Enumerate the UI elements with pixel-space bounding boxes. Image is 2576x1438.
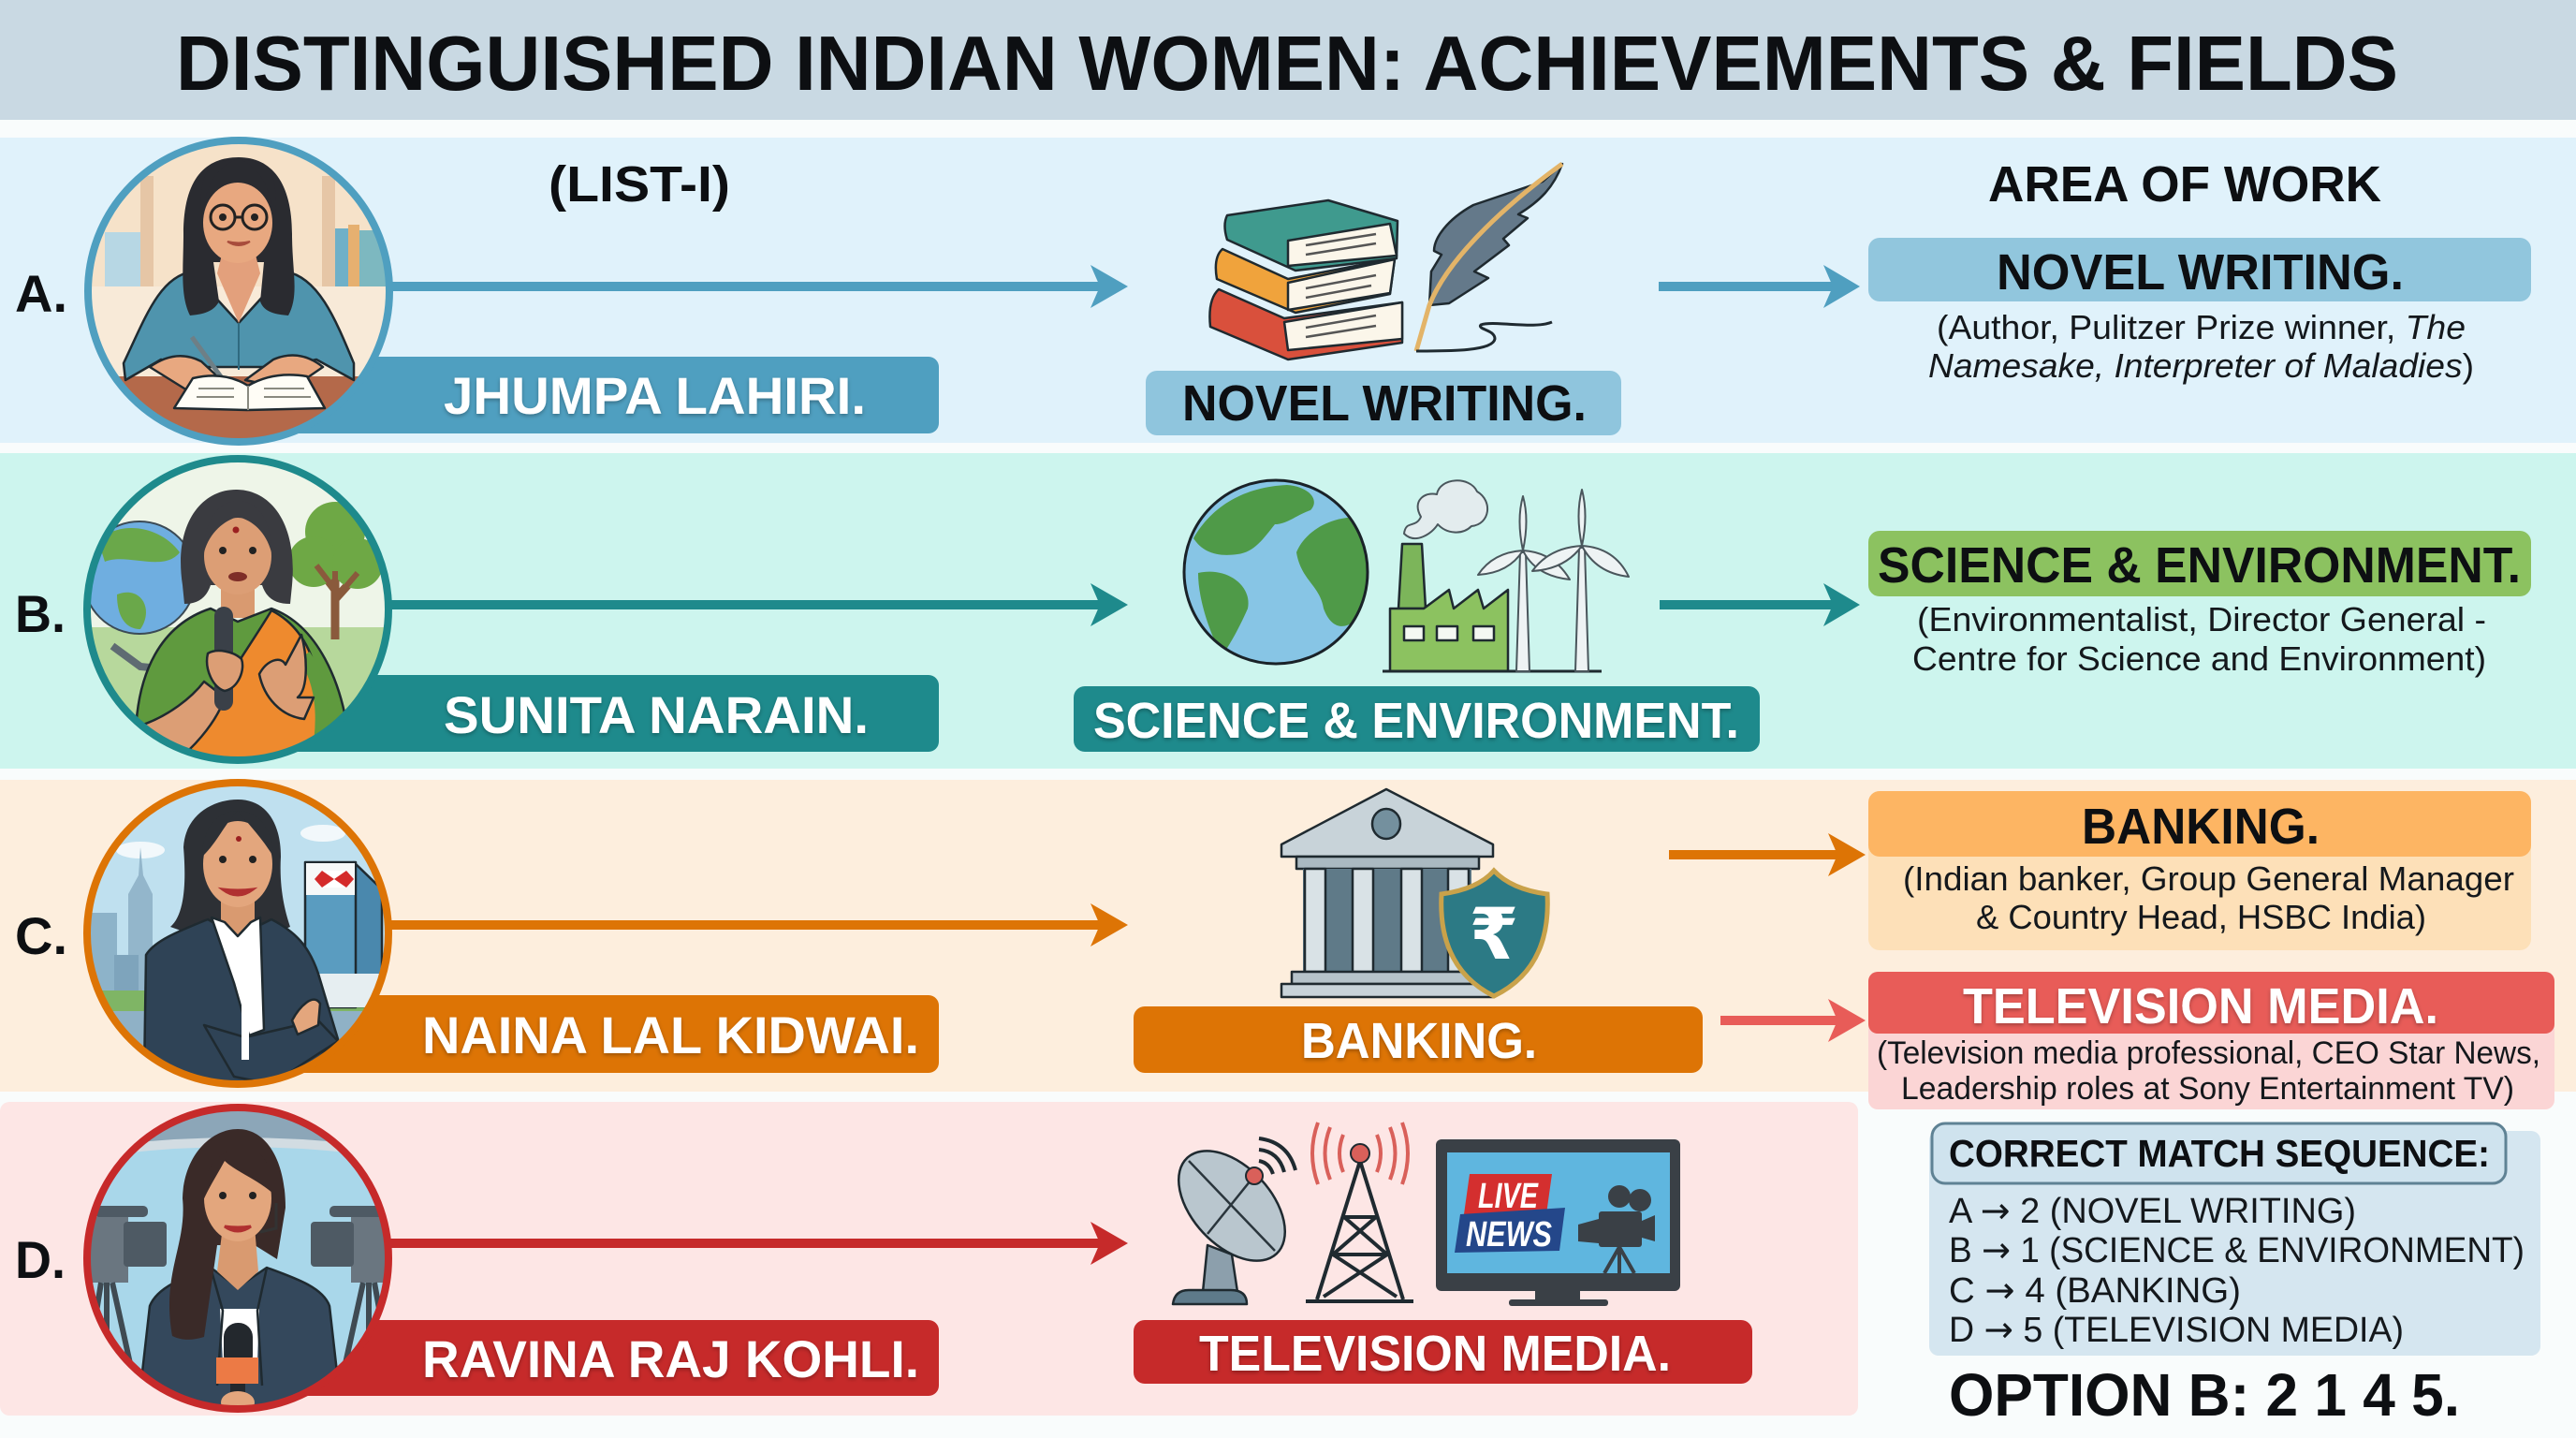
match list: C → 4 (BANKING)	[1949, 1269, 2241, 1311]
name banner: Sunita Narain	[281, 675, 939, 752]
panel: row C Naina Lal Kidwai	[0, 780, 2576, 1095]
arrow: icon to description	[1659, 265, 1860, 308]
match list	[1949, 1190, 2525, 1350]
portrait: banker with arms crossed	[82, 781, 393, 1095]
field label: banking: BANKING.	[1301, 1013, 1537, 1069]
row letter B: B.	[15, 584, 66, 643]
panel: correct match sequence	[1929, 1123, 2540, 1356]
match list: D → 5 (TELEVISION MEDIA)	[1949, 1309, 2404, 1350]
description card: novel writing	[1868, 238, 2531, 385]
answer: option B: OPTION B: 2 1 4 5.	[1949, 1361, 2460, 1429]
portrait: news anchor with microphone	[82, 1106, 393, 1414]
name banner: Sunita Narain: SUNITA NARAIN.	[444, 685, 869, 744]
description card: science and environment: (Environmentalist, Director General -	[1917, 600, 2486, 638]
description card: novel writing: Namesake, Interpreter of Maladies )	[1928, 346, 2474, 385]
arrow: person to icon	[388, 583, 1128, 626]
description card: television media: (Television media professional, CEO Star News,	[1877, 1035, 2540, 1071]
name banner: Jhumpa Lahiri: JHUMPA LAHIRI.	[444, 366, 866, 425]
description card: banking: & Country Head, HSBC India)	[1976, 898, 2426, 936]
title banner: DISTINGUISHED INDIAN WOMEN: ACHIEVEMENTS & FIELDS	[176, 20, 2398, 107]
name banner: Naina Lal Kidwai: NAINA LAL KIDWAI.	[422, 1005, 919, 1064]
name banner: Naina Lal Kidwai	[281, 995, 939, 1073]
icon: satellite dish, tower and live news TV: NEWS	[1466, 1215, 1552, 1255]
description card: television media: Leadership roles at Sony Entertainment TV)	[1901, 1071, 2514, 1107]
arrow: person to icon	[388, 903, 1128, 946]
arrow: icon to banking card	[1669, 833, 1866, 876]
match list: A → 2 (NOVEL WRITING)	[1949, 1190, 2356, 1231]
panel: row B Sunita Narain	[0, 453, 2576, 777]
heading: correct match sequence: CORRECT MATCH SEQUENCE:	[1949, 1132, 2490, 1175]
match list: B → 1 (SCIENCE & ENVIRONMENT)	[1949, 1229, 2525, 1270]
description card: science and environment: Centre for Science and Environment)	[1912, 639, 2486, 678]
panel: row A Jhumpa Lahiri	[0, 138, 2576, 451]
row letter A: A.	[15, 264, 67, 323]
panel: row D Ravina Raj Kohli	[0, 1102, 1858, 1416]
arrow: person to icon	[388, 1222, 1128, 1265]
icon: bank with rupee shield	[1281, 789, 1547, 997]
name banner: Ravina Raj Kohli	[281, 1320, 939, 1396]
icon: globe, factory and wind turbines	[1184, 480, 1629, 671]
title banner	[0, 0, 2576, 120]
description card: banking	[1868, 791, 2531, 950]
description card: science and environment: SCIENCE & ENVIRONMENT.	[1878, 537, 2521, 594]
icon: satellite dish, tower and live news TV: LIVE	[1478, 1177, 1539, 1216]
arrow: icon to television card	[1720, 999, 1866, 1042]
description card: science and environment	[1868, 531, 2531, 678]
description card: television media	[1868, 972, 2554, 1109]
heading: correct match sequence	[1932, 1123, 2506, 1183]
field label: science and environment: SCIENCE & ENVIRONMENT.	[1093, 693, 1739, 749]
icon: books and quill	[1209, 164, 1562, 360]
description card: television media: TELEVISION MEDIA.	[1963, 978, 2438, 1034]
field label: television media: TELEVISION MEDIA.	[1199, 1326, 1671, 1382]
description card: banking: BANKING.	[2082, 799, 2320, 855]
row letter C: C.	[15, 906, 67, 965]
rupee glyph: ₹	[1470, 892, 1518, 976]
portrait: woman writing at desk	[84, 139, 393, 451]
column heading: list-I: (LIST-I)	[549, 156, 730, 213]
description card: novel writing: (Author, Pulitzer Prize winner, The	[1937, 308, 2466, 346]
column heading: area of work: AREA OF WORK	[1988, 156, 2381, 213]
field label: novel writing: NOVEL WRITING.	[1182, 375, 1587, 432]
description card: banking: (Indian banker, Group General Manager	[1903, 859, 2514, 898]
portrait: woman speaking with globe and tree	[82, 458, 393, 777]
icon: satellite dish, tower and live news TV	[1159, 1123, 1680, 1306]
name banner: Ravina Raj Kohli: RAVINA RAJ KOHLI.	[422, 1329, 919, 1388]
description card: novel writing: NOVEL WRITING.	[1997, 244, 2404, 301]
arrow: person to icon	[388, 265, 1128, 308]
name banner: Jhumpa Lahiri	[281, 357, 939, 433]
row letter D: D.	[15, 1230, 66, 1289]
arrow: icon to description	[1660, 583, 1860, 626]
field label: banking	[1134, 1006, 1703, 1073]
